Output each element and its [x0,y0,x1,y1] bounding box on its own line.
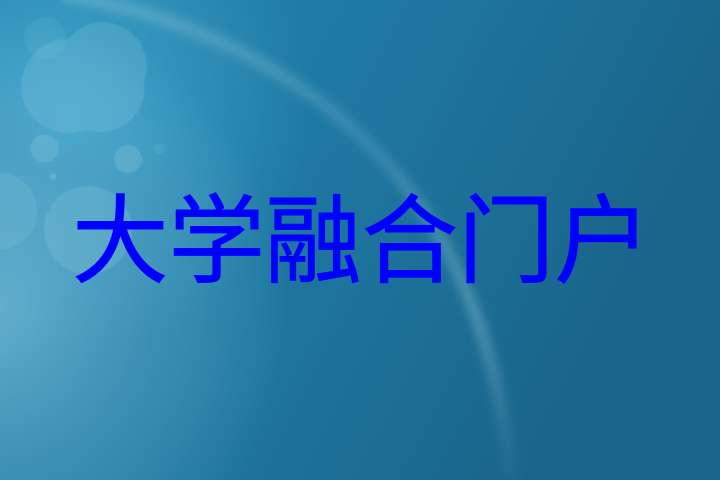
bokeh circles [0,17,164,274]
light arc [60,0,512,480]
title: 大学融合门户 [72,189,651,296]
